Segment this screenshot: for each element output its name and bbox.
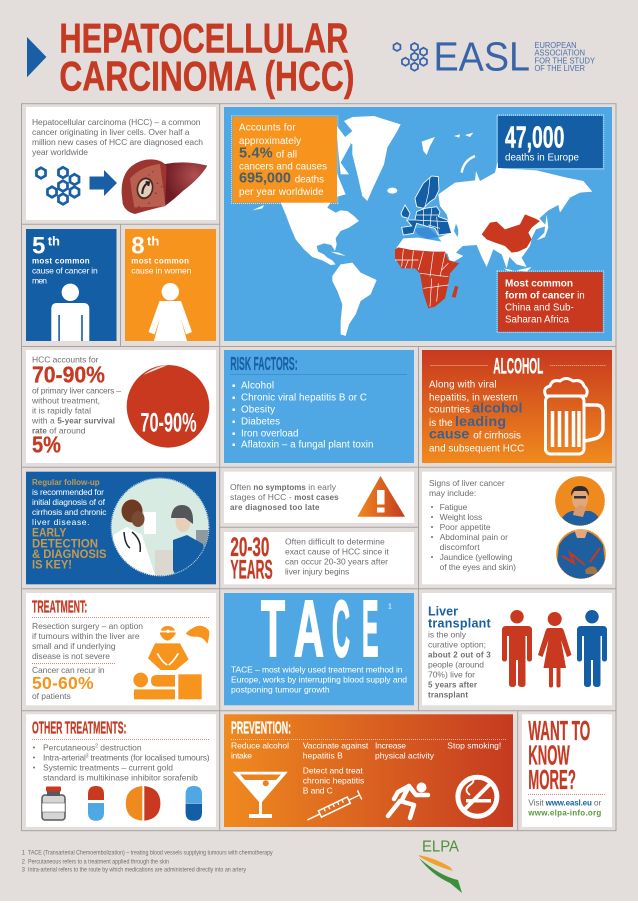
panel: prevention: Stop smoking!: [447, 741, 501, 751]
panel: alcohol: and subsequent HCC: [429, 444, 524, 455]
panel: 5th most common in men: cause of cancer in: [32, 265, 98, 275]
map: China: [482, 214, 540, 253]
TACE heading: E: [362, 584, 378, 673]
panel: other treatments: [26, 714, 216, 827]
title: HEPATOCELLULAR: [59, 15, 348, 62]
intro text: year worldwide: [32, 147, 88, 157]
footnotes: Intra-arterial refers to the route by which medications are administered directly into an artery: [28, 868, 246, 874]
title: [59, 15, 354, 100]
footnotes: Percutaneous refers to a treatment applied through the skin: [28, 859, 169, 865]
callout: most common form: China and Sub-: [505, 303, 574, 314]
EASL logo: [394, 34, 596, 80]
footnotes: 1: [22, 851, 26, 857]
ELPA logo: ELPA: [422, 839, 460, 856]
footnotes: 2: [22, 859, 26, 865]
panel: other treatments: destruction: [98, 743, 142, 753]
panel: TACE: [224, 584, 414, 705]
panel: 20-30 years: liver injury begins: [285, 567, 349, 577]
callout: 47,000 deaths: 47,000: [505, 119, 564, 154]
callout: 5.4% of all cancers: per year worldwide: [239, 187, 324, 198]
ELPA logo: [418, 839, 462, 893]
panel: world map: [224, 107, 612, 341]
panel: liver transplant: transplant: [428, 691, 468, 700]
panel: prevention: [224, 714, 513, 827]
panel: risk factors: [224, 350, 414, 463]
callout: 5.4% of all cancers: deaths: [295, 175, 324, 186]
panel: prevention: Detect and treat: [303, 766, 363, 776]
EASL logo: FOR THE STUDY: [534, 56, 596, 65]
callout: most common form: form of cancer in: [505, 291, 585, 302]
panel: other treatments: Percutaneous: [43, 743, 95, 753]
panel: 20-30 years: can occur 20-30 years after: [285, 557, 388, 567]
map: Europe: [401, 176, 452, 239]
panel: signs of liver cancer: Fatigue: [440, 502, 468, 512]
panel: other treatments: Intra-arterial: [43, 753, 86, 763]
panel: 5th most common in men: men: [32, 275, 47, 285]
panel: prevention: PREVENTION:: [231, 717, 291, 737]
panel: signs of liver cancer: Signs of liver cancer: [429, 478, 505, 488]
map: Americas and Greenland: [252, 116, 401, 336]
callout: 47,000 deaths: [497, 115, 604, 169]
TACE heading: [261, 584, 392, 673]
panel: signs of liver cancer: discomfort: [440, 542, 480, 552]
panel: risk factors: Diabetes: [241, 417, 280, 428]
title: CARCINOMA (HCC): [59, 53, 354, 100]
callout: most common form: [497, 271, 604, 333]
footnotes: TACE (Transarterial Chemoembolization) – treating blood vessels supplying tumours with chemotherapy: [28, 851, 273, 857]
panel: prevention: intake: [231, 751, 252, 761]
callout: most common form: Saharan Africa: [505, 315, 570, 326]
icon: title arrow: [27, 37, 46, 77]
panel: liver transplant: is the only: [428, 630, 467, 640]
panel: 8th most common in women: most common: [131, 256, 189, 265]
panel: signs of liver cancer: of the eyes and skin): [440, 562, 516, 572]
icon: liver cells: [36, 167, 79, 204]
panel: treatment: Resection surgery – an option: [32, 621, 143, 631]
intro text: cancer originating in liver cells. Over half a: [32, 127, 190, 137]
icon: woman: [148, 283, 192, 341]
panel: no symptoms: Often no symptoms in early: [230, 482, 337, 492]
panel: HCC 70-90%: HCC accounts for: [32, 355, 99, 365]
icon: round tablet: [126, 786, 160, 821]
panel: treatment: [26, 593, 216, 705]
panel: signs of liver cancer: Weight loss: [440, 512, 482, 522]
panel: signs of liver cancer: Abdominal pain or: [440, 532, 508, 542]
panel: regular follow-up: DETECTION: [32, 537, 98, 551]
icon: vial: [42, 786, 65, 820]
icon: beer mug: [545, 378, 603, 454]
panel: regular follow-up: EARLY: [32, 526, 66, 540]
panel: alcohol: [422, 350, 612, 463]
map: Africa: [395, 238, 459, 308]
panel: prevention: physical activity: [375, 751, 435, 761]
panel: prevention: B and C: [303, 786, 333, 796]
panel: want to know more: KNOW: [528, 739, 570, 770]
intro text: million new cases of HCC are diagnosed each: [32, 137, 203, 147]
callout: 5.4% of all cancers: approximately: [239, 136, 301, 147]
panel: HCC 70-90%: without treatment,: [31, 395, 100, 405]
callout: 5.4% of all cancers: 5.4%: [239, 145, 273, 161]
panel: other treatments: 2: [95, 744, 98, 750]
callout: 5.4% of all cancers: Accounts for: [239, 123, 296, 134]
panel: treatment: 50-60%: [32, 673, 94, 693]
TACE heading: 1: [388, 603, 392, 610]
panel: alcohol: of cirrhosis: [473, 430, 521, 441]
EASL logo: EUROPEAN: [534, 41, 577, 50]
panel: regular follow-up: Regular follow-up: [32, 478, 100, 487]
icon: syringe: [305, 790, 362, 825]
panel: HCC 70-90%: with a 5-year survival: [31, 415, 115, 425]
panel: 5th most common in men: most common: [32, 256, 90, 265]
panel: no symptoms: [224, 472, 414, 523]
icon: person with nausea: [555, 476, 605, 530]
panel: signs of liver cancer: Jaundice (yellowing: [440, 552, 513, 562]
panel: 5th most common in men: th: [48, 234, 60, 249]
panel: alcohol: alcohol: [472, 401, 522, 417]
icon: surgeon and patient: [133, 626, 209, 699]
panel: alcohol: countries: [429, 405, 470, 416]
icon: warning triangle: [357, 476, 405, 517]
icon: man: [51, 284, 89, 341]
panel: prevention: Vaccinate against: [303, 741, 369, 751]
panel: signs of liver cancer: may include:: [429, 488, 476, 498]
panel: treatment: of patients: [32, 691, 71, 701]
panel: other treatments: OTHER TREATMENTS:: [32, 717, 126, 737]
panel: HCC 70-90%: rate of around: [32, 425, 86, 435]
panel: risk factors: Alcohol: [241, 381, 274, 392]
icon: blue man: [577, 610, 607, 687]
panel: 20-30 years: 20-30: [230, 532, 269, 562]
panel: regular follow-up: initial diagnosis of of: [32, 497, 106, 507]
panel: regular follow-up: [26, 472, 216, 585]
map: Eurasia: [387, 133, 592, 272]
panel: TACE: TACE – most widely used treatment method in: [231, 664, 403, 674]
panel: liver transplant: transplant: [428, 617, 492, 631]
panel: HCC 70-90%: it is rapidly fatal: [32, 405, 91, 415]
panel: want to know more: www.elpa-info.org: [527, 809, 601, 818]
panel: TACE: postponing tumour growth: [231, 684, 330, 694]
panel: 8th most common in women: [125, 229, 216, 341]
icon: red woman: [538, 612, 572, 688]
panel: regular follow-up: cirrhosis and chronic: [32, 507, 107, 517]
pie chart: 70-90%: [140, 408, 197, 438]
panel: treatment: small and if underlying: [32, 641, 116, 651]
footnotes: [22, 851, 273, 874]
panel: want to know more: Visit www.easl.eu or: [528, 798, 601, 808]
panel: prevention: Increase: [375, 741, 406, 751]
callout: 5.4% of all cancers: cancers and causes: [239, 162, 327, 173]
panel: 8th most common in women: 8: [131, 232, 145, 259]
panel: prevention: Reduce alcohol: [231, 741, 289, 751]
panel: other treatments: treatments (for localised tumours): [88, 753, 210, 763]
panel: HCC 70-90%: [26, 350, 216, 463]
icon: runner: [388, 782, 428, 818]
panel: risk factors: RISK FACTORS:: [230, 353, 298, 374]
icon: capsule blue: [186, 786, 202, 821]
icon: capsule red and blue: [88, 786, 104, 821]
panel: 20-30 years: exact cause of HCC since it: [285, 547, 389, 557]
icon: no smoking: [458, 776, 497, 816]
intro text: Hepatocellular carcinoma (HCC) – a common: [32, 117, 201, 127]
panel: regular follow-up: is recommended for: [32, 487, 104, 497]
icon: liver: [122, 159, 207, 214]
panel: liver transplant: 70%) live for: [428, 670, 475, 680]
panel: HCC 70-90%: of primary liver cancers –: [32, 385, 121, 395]
panel: treatment: if tumours within the liver are: [32, 631, 140, 641]
panel: liver transplant: 5 years after: [428, 681, 477, 690]
panel: TACE: Europe, works by interrupting blood supply and: [231, 674, 407, 684]
TACE heading: T: [261, 584, 285, 673]
callout: 47,000 deaths: deaths in Europe: [505, 153, 580, 164]
panel: treatment: disease is not severe: [32, 651, 110, 661]
panel: signs of liver cancer: Poor appetite: [440, 522, 491, 532]
panel: 5th most common in men: 5: [32, 232, 45, 259]
panel: 20-30 years: [224, 532, 414, 584]
callout: 5.4% of all cancers: 695,000: [239, 171, 291, 187]
panel: alcohol: hepatitis, in western: [429, 393, 518, 404]
panel: alcohol: leading: [455, 414, 506, 430]
icon: arrow: [90, 170, 117, 196]
panel: 20-30 years: YEARS: [230, 554, 273, 584]
panel: 8th most common in women: cause in women: [131, 265, 192, 275]
panel: alcohol: is the: [429, 418, 453, 429]
panel: want to know more: MORE?: [528, 764, 576, 795]
panel: treatment: TREATMENT:: [32, 597, 87, 617]
panel: want to know more: [522, 714, 612, 827]
panel: other treatments: standard is multikinase inhibitor sorafenib: [43, 773, 198, 783]
panel: risk factors: Aflatoxin – a fungal plant toxin: [241, 440, 374, 451]
panel: liver transplant: people (around: [428, 660, 484, 670]
TACE heading: C: [332, 584, 350, 673]
panel: liver transplant: [422, 593, 612, 705]
panel: HCC 70-90%: 70-90%: [32, 362, 105, 388]
callout: most common form: Most common: [505, 279, 573, 290]
panel: liver transplant: curative option;: [428, 640, 486, 650]
icon: cocktail glass: [233, 772, 288, 818]
intro text: [32, 117, 203, 157]
EASL logo: OF THE LIVER: [534, 64, 585, 73]
panel: 5th most common in men: [26, 229, 116, 341]
panel: liver transplant: about 2 out of 3: [428, 651, 491, 660]
panel: HCC 70-90%: 5%: [32, 432, 61, 458]
panel: regular follow-up: & DIAGNOSIS: [32, 547, 106, 561]
icon: person with abdominal pain: [555, 529, 607, 580]
panel: 20-30 years: Often difficult to determine: [285, 537, 385, 547]
panel: liver transplant: Liver: [428, 605, 458, 619]
TACE heading: A: [294, 584, 324, 673]
panel: alcohol: ALCOHOL: [493, 353, 543, 378]
icon: red man: [502, 610, 532, 687]
panel: prevention: chronic hepatitis: [303, 776, 364, 786]
panel: risk factors: Obesity: [241, 405, 275, 416]
panel: alcohol: cause: [429, 426, 469, 442]
panel: no symptoms: are diagnosed too late: [230, 503, 320, 512]
panel: prevention: hepatitis B: [303, 751, 343, 761]
EASL logo: EASL: [434, 34, 530, 80]
panel: risk factors: Chronic viral hepatitis B or C: [241, 393, 367, 404]
panel: regular follow-up: liver disease.: [32, 517, 90, 527]
pie chart: [127, 365, 209, 448]
panel: alcohol: Along with viral: [429, 380, 497, 391]
panel: no symptoms: stages of HCC - most cases: [230, 492, 339, 502]
footnotes: 3: [22, 868, 26, 874]
panel: other treatments: Systemic treatments – current gold: [43, 763, 173, 773]
EASL logo: ASSOCIATION: [534, 49, 585, 58]
panel: 8th most common in women: th: [147, 234, 159, 249]
callout: 5.4% of all cancers: of all: [276, 149, 297, 160]
panel: treatment: Cancer can recur in: [32, 665, 105, 675]
callout: 5.4% of all cancers: [232, 116, 338, 204]
illustration: doctor and patient: [111, 478, 212, 585]
panel: signs of liver cancer: [422, 472, 612, 584]
panel: regular follow-up: IS KEY!: [32, 557, 72, 571]
panel: intro: [26, 107, 216, 220]
panel: other treatments: 3: [86, 754, 89, 760]
panel: risk factors: Iron overload: [241, 429, 298, 440]
